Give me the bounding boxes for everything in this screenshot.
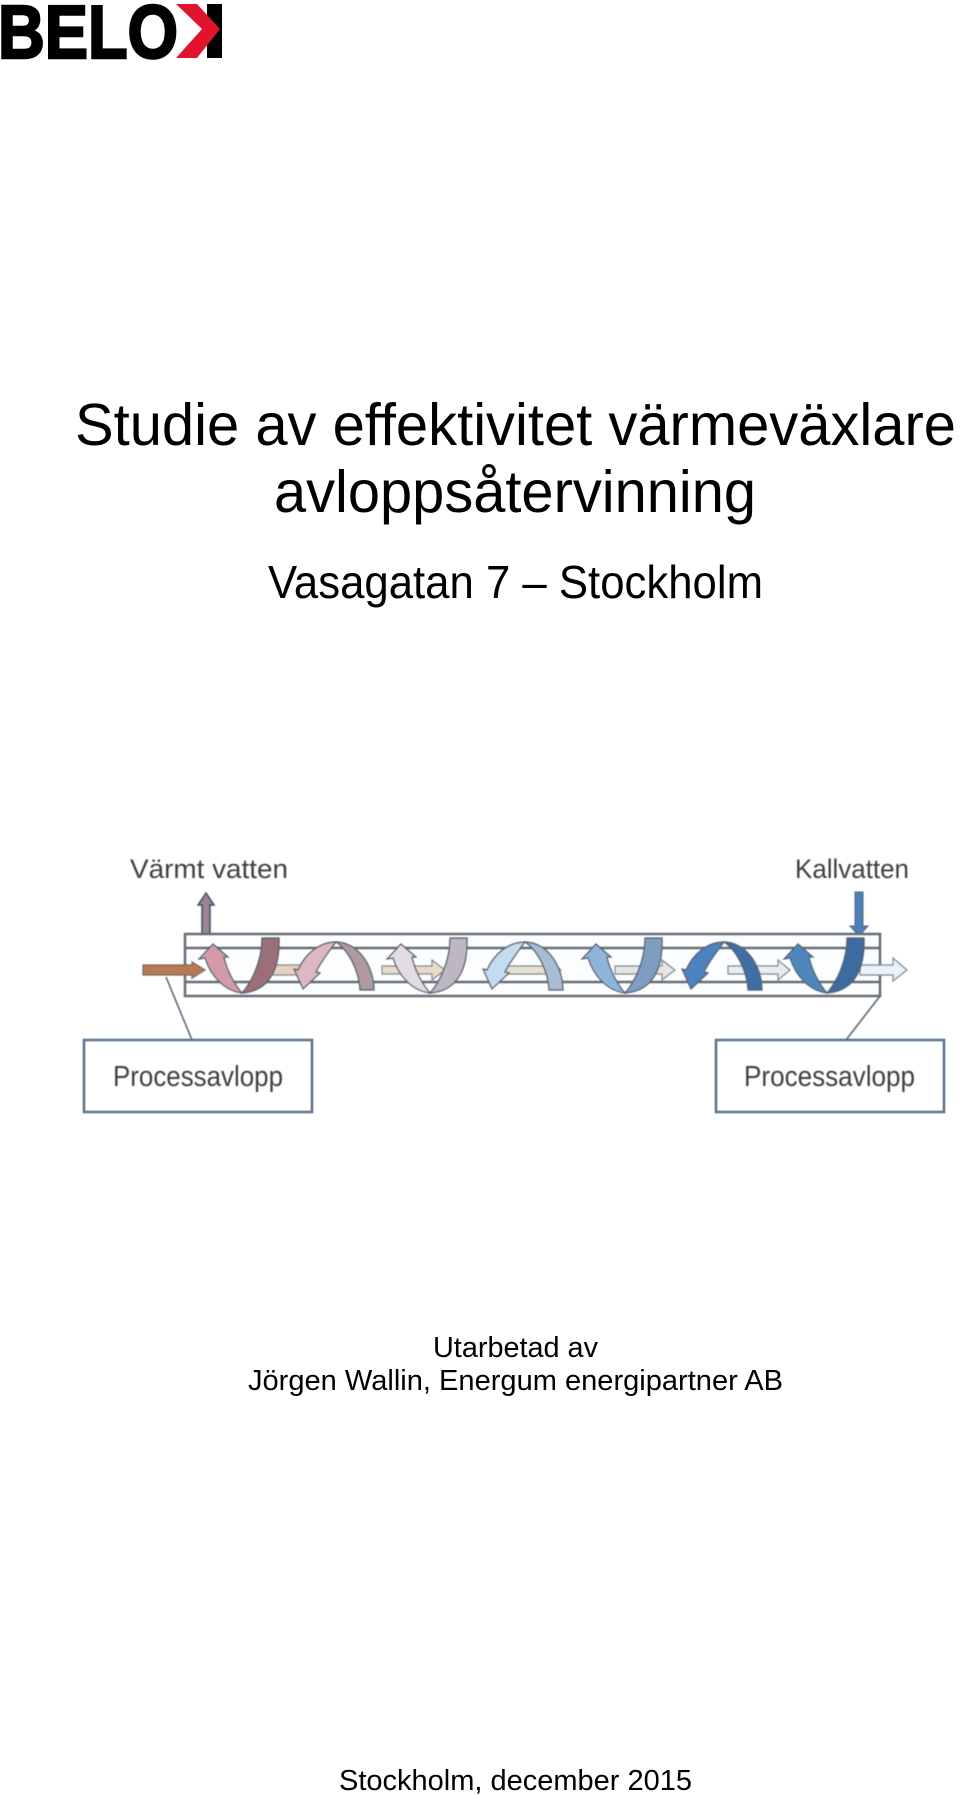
box: Processavlopp left: Processavlopp <box>113 1061 283 1093</box>
leader line: left <box>166 977 192 1040</box>
inner flow arrows <box>272 958 907 981</box>
subtitle: address: Vasagatan 7 – Stockholm <box>268 556 763 608</box>
title: avloppsåtervinning <box>274 459 756 525</box>
label: Kallvatten: Kallvatten <box>795 854 909 884</box>
title: Studie av effektivitet värmeväxlare <box>75 392 956 458</box>
title <box>75 392 956 525</box>
author credit: Jörgen Wallin, Energum energipartner AB <box>248 1365 783 1397</box>
leader line: right <box>846 996 880 1040</box>
spiral coil <box>199 938 864 993</box>
arrow: hot water out <box>198 893 214 934</box>
arrow: cold water in <box>850 892 868 936</box>
author credit: Utarbetad av <box>433 1332 598 1364</box>
diagram: heat exchanger <box>84 854 944 1112</box>
label: Värmt vatten: Värmt vatten <box>130 854 288 884</box>
arrow: process water in <box>143 962 205 978</box>
box: Processavlopp right <box>716 1040 944 1112</box>
author credit <box>248 1332 783 1397</box>
box: Processavlopp left <box>84 1040 312 1112</box>
exchanger tube <box>185 934 880 996</box>
box: Processavlopp right: Processavlopp <box>744 1061 915 1093</box>
